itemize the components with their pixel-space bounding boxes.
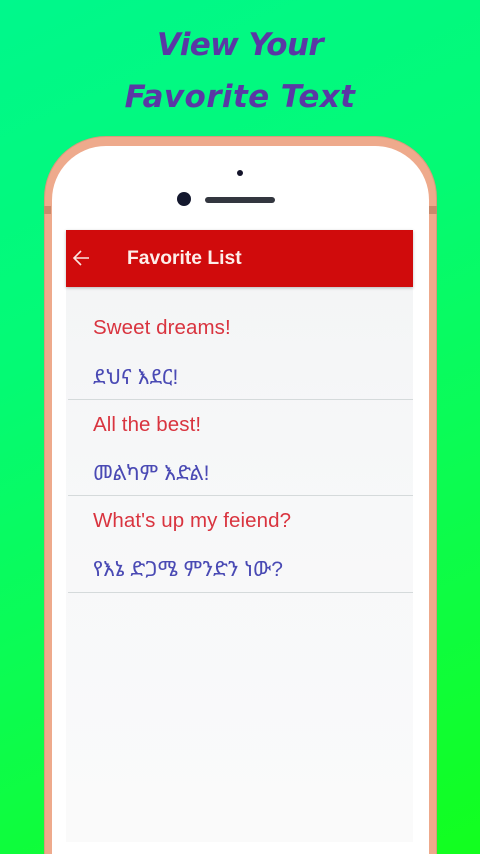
icon: earpiece — [205, 197, 275, 203]
list item: what's up — [68, 509, 413, 593]
side notch right — [429, 206, 437, 214]
icon: camera — [177, 192, 191, 206]
list item: all the best — [68, 413, 413, 496]
icon: speaker dot — [237, 170, 243, 176]
app bar — [66, 230, 413, 287]
title: View Your — [157, 27, 323, 63]
list item: all the best: All the best! — [93, 413, 201, 436]
list item: sweet dreams: Sweet dreams! — [93, 316, 231, 339]
app screen — [66, 287, 413, 842]
list item: sweet dreams: ደህና እደር! — [93, 366, 178, 389]
list item: all the best: መልካም እድል! — [93, 462, 210, 485]
app bar title: Favorite List — [127, 248, 242, 269]
phone frame — [44, 136, 437, 854]
list item: what's up: What's up my feiend? — [93, 509, 291, 532]
side notch left — [44, 206, 51, 214]
list item: what's up: የእኔ ድጋሜ ምንድን ነው? — [93, 558, 283, 581]
list item: sweet dreams — [68, 316, 413, 400]
icon: back arrow — [73, 250, 89, 266]
title: Favorite Text — [125, 79, 355, 115]
phone screen — [52, 146, 429, 854]
title — [125, 27, 356, 115]
